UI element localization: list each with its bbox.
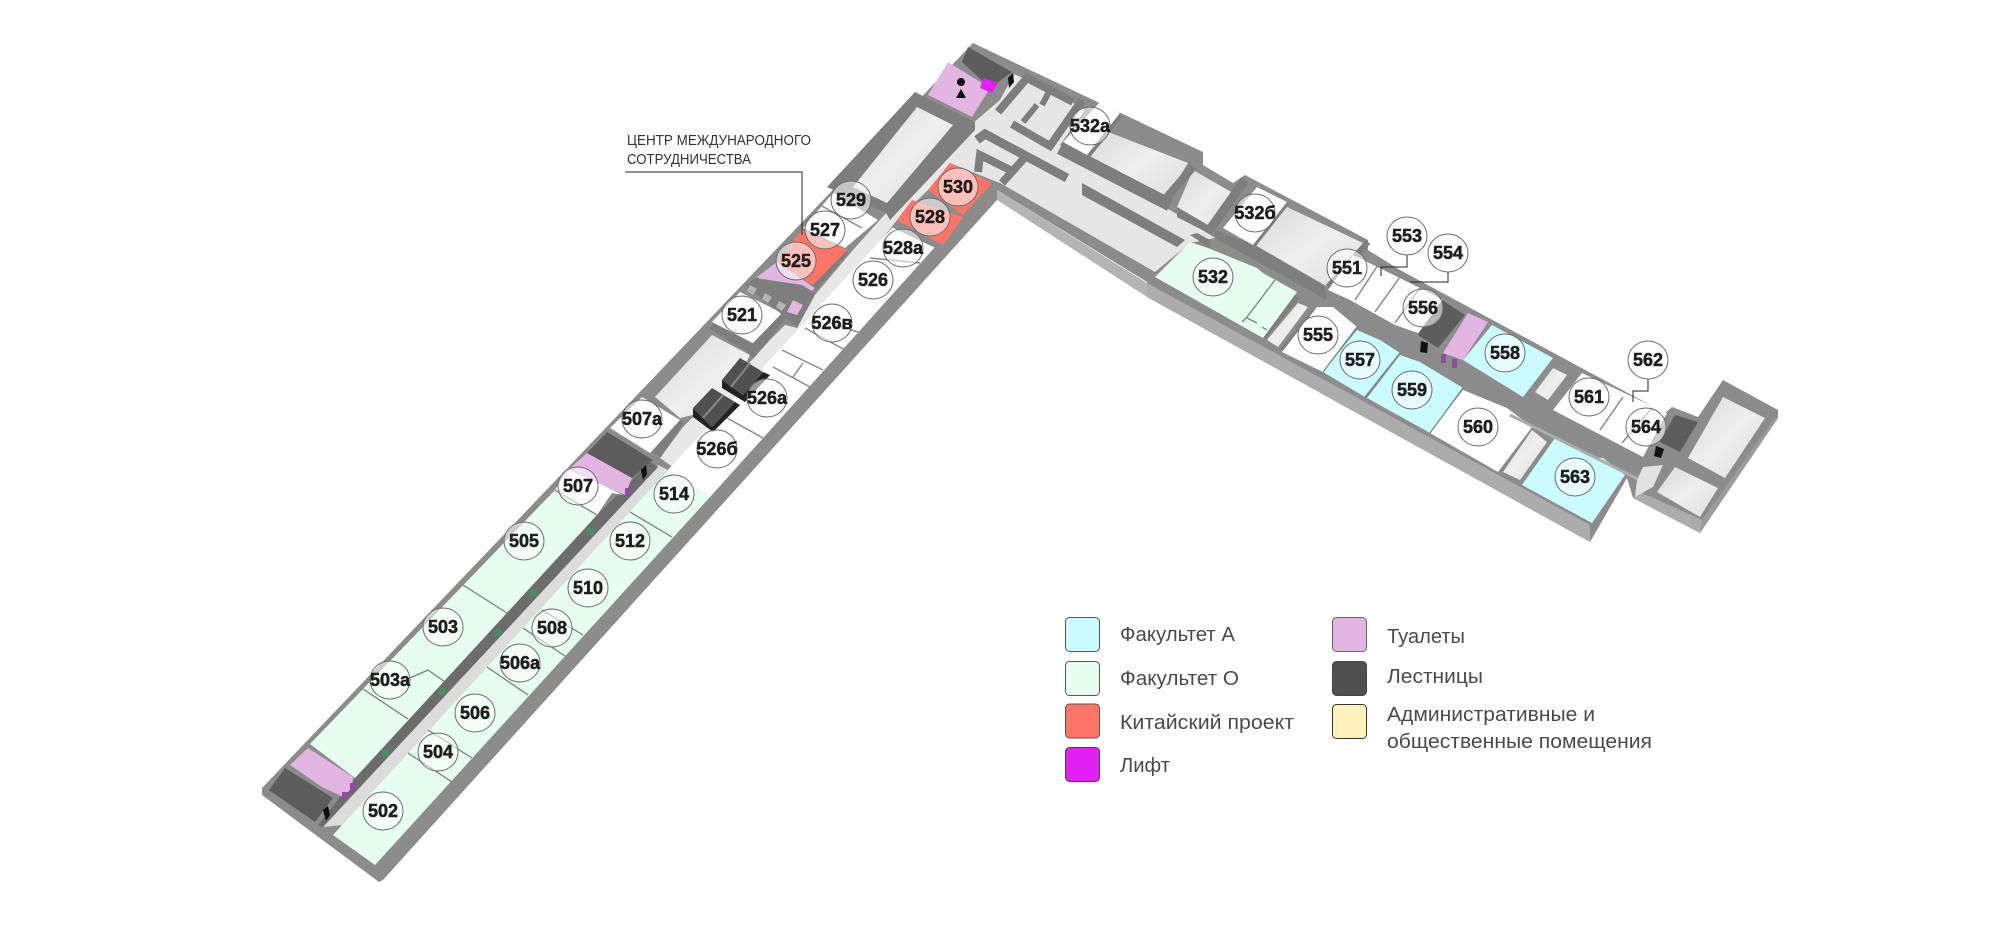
legend: Faculty A bbox=[1066, 618, 1235, 652]
559 bbox=[1392, 371, 1432, 409]
leader lines bbox=[1381, 255, 1648, 402]
purple door marks bbox=[342, 354, 1457, 800]
floor: east wing junction and corridor bbox=[950, 74, 1215, 272]
floor: west corridor bbox=[323, 465, 668, 827]
526: 526 bbox=[858, 270, 888, 290]
corridor highlight bbox=[1510, 415, 1640, 480]
514: 514 bbox=[659, 484, 689, 504]
room 502-505 faculty O, north side bbox=[310, 490, 597, 778]
507а: 507а bbox=[622, 409, 663, 429]
floor plan bbox=[262, 43, 1778, 882]
legend: Admin and public rooms: Административные и bbox=[1387, 703, 1595, 726]
556 bbox=[1403, 289, 1443, 327]
icon: toilet person bbox=[956, 78, 966, 98]
551: 551 bbox=[1332, 258, 1362, 278]
503а bbox=[370, 661, 411, 699]
532а: 532а bbox=[1070, 116, 1111, 136]
legend: Lift bbox=[1066, 748, 1171, 782]
526б: 526б bbox=[696, 439, 738, 459]
507а bbox=[622, 400, 663, 438]
556: 556 bbox=[1408, 298, 1438, 318]
527 bbox=[805, 211, 845, 249]
554 bbox=[1428, 234, 1468, 272]
526а bbox=[747, 379, 788, 417]
560 bbox=[1458, 408, 1498, 446]
east end corridor bbox=[1635, 465, 1663, 497]
unassigned white rooms bbox=[555, 102, 1667, 515]
532а bbox=[1070, 107, 1111, 145]
505 bbox=[504, 522, 544, 560]
outer side faces bbox=[997, 190, 1778, 542]
annotation: international cooperation centre bbox=[625, 133, 811, 235]
China project rooms bbox=[777, 163, 992, 285]
563 bbox=[1555, 458, 1595, 496]
525: 525 bbox=[781, 251, 811, 271]
561: 561 bbox=[1574, 387, 1604, 407]
annotation: international cooperation centre: СОТРУДНИЧЕСТВА bbox=[627, 152, 751, 168]
526в: 526в bbox=[811, 313, 853, 333]
502: 502 bbox=[368, 801, 398, 821]
building base walls bbox=[262, 43, 1778, 882]
526а: 526а bbox=[747, 388, 788, 408]
faculty A rooms bbox=[1323, 325, 1625, 523]
510: 510 bbox=[573, 578, 603, 598]
floor: upper west room bbox=[853, 107, 953, 203]
529: 529 bbox=[836, 190, 866, 210]
564 bbox=[1626, 408, 1666, 446]
554: 554 bbox=[1433, 243, 1463, 263]
562 bbox=[1628, 341, 1668, 379]
floor: lower west room bbox=[655, 335, 763, 427]
interior walls bbox=[657, 78, 1368, 455]
530 bbox=[938, 168, 978, 206]
562: 562 bbox=[1633, 350, 1663, 370]
528 bbox=[910, 198, 950, 236]
green door marks bbox=[382, 528, 594, 756]
503 bbox=[423, 608, 463, 646]
521 bbox=[722, 296, 762, 334]
528: 528 bbox=[915, 207, 945, 227]
561 bbox=[1569, 378, 1609, 416]
506а bbox=[500, 644, 541, 682]
558 bbox=[1485, 334, 1525, 372]
555 bbox=[1298, 316, 1338, 354]
553 bbox=[1387, 217, 1427, 255]
521: 521 bbox=[727, 305, 757, 325]
532 bbox=[1193, 258, 1233, 296]
legend bbox=[1066, 618, 1652, 782]
508: 508 bbox=[537, 618, 567, 638]
526 bbox=[853, 261, 893, 299]
532б: 532б bbox=[1234, 203, 1276, 223]
557: 557 bbox=[1345, 350, 1375, 370]
503: 503 bbox=[428, 617, 458, 637]
floor: grey rooms of east wing bbox=[1090, 128, 1765, 517]
wall bands in east wing bbox=[1082, 183, 1327, 300]
503а: 503а bbox=[370, 670, 411, 690]
legend: China project bbox=[1066, 704, 1295, 738]
529 bbox=[831, 181, 871, 219]
legend: Faculty O bbox=[1066, 662, 1239, 696]
528а bbox=[883, 229, 924, 267]
512: 512 bbox=[615, 531, 645, 551]
551 bbox=[1327, 249, 1367, 287]
510 bbox=[568, 569, 608, 607]
legend: Lift: Лифт bbox=[1120, 754, 1171, 777]
small toilet cubicles bbox=[745, 278, 815, 328]
525 bbox=[776, 242, 816, 280]
532б bbox=[1234, 194, 1276, 232]
white room dividers bbox=[727, 205, 1652, 443]
504 bbox=[418, 733, 458, 771]
legend: Admin and public rooms bbox=[1332, 703, 1652, 753]
legend: Toilets bbox=[1332, 618, 1465, 652]
504: 504 bbox=[423, 742, 453, 762]
legend: Stairs bbox=[1332, 662, 1483, 696]
lift bbox=[980, 78, 998, 93]
upper west room walls bbox=[827, 92, 975, 220]
legend: Stairs: Лестницы bbox=[1387, 665, 1483, 688]
506 bbox=[455, 694, 495, 732]
532: 532 bbox=[1198, 267, 1228, 287]
lockers bbox=[693, 358, 770, 432]
530: 530 bbox=[943, 177, 973, 197]
512 bbox=[610, 522, 650, 560]
room number labels bbox=[363, 107, 1668, 830]
555: 555 bbox=[1303, 325, 1333, 345]
508 bbox=[532, 609, 572, 647]
528а: 528а bbox=[883, 238, 924, 258]
526в bbox=[811, 304, 853, 342]
annotation: international cooperation centre: ЦЕНТР МЕЖДУНАРОДНОГО bbox=[627, 133, 811, 149]
553: 553 bbox=[1392, 226, 1422, 246]
legend: Faculty O: Факультет О bbox=[1120, 667, 1239, 690]
506а: 506а bbox=[500, 653, 541, 673]
527: 527 bbox=[810, 220, 840, 240]
558: 558 bbox=[1490, 343, 1520, 363]
legend: Faculty A: Факультет А bbox=[1120, 623, 1235, 646]
506: 506 bbox=[460, 703, 490, 723]
560: 560 bbox=[1463, 417, 1493, 437]
door dots bbox=[323, 73, 1664, 821]
legend: China project: Китайский проект bbox=[1120, 711, 1295, 734]
507: 507 bbox=[563, 476, 593, 496]
559: 559 bbox=[1397, 380, 1427, 400]
legend: Toilets: Туалеты bbox=[1387, 625, 1465, 648]
stairs bbox=[269, 47, 1698, 822]
legend: Admin and public rooms: общественные помещения bbox=[1387, 730, 1652, 753]
floor: middle corridor bbox=[660, 123, 985, 470]
563: 563 bbox=[1560, 467, 1590, 487]
west corridor wall bbox=[318, 462, 658, 827]
507 bbox=[558, 467, 598, 505]
514 bbox=[654, 475, 694, 513]
room dividers bbox=[363, 280, 1463, 782]
room 532 faculty O bbox=[1155, 242, 1297, 338]
564: 564 bbox=[1631, 417, 1661, 437]
faculty O, south side bbox=[333, 470, 710, 865]
526б bbox=[696, 430, 738, 468]
557 bbox=[1340, 341, 1380, 379]
505: 505 bbox=[509, 531, 539, 551]
502 bbox=[363, 792, 403, 830]
toilets bbox=[290, 62, 1488, 797]
